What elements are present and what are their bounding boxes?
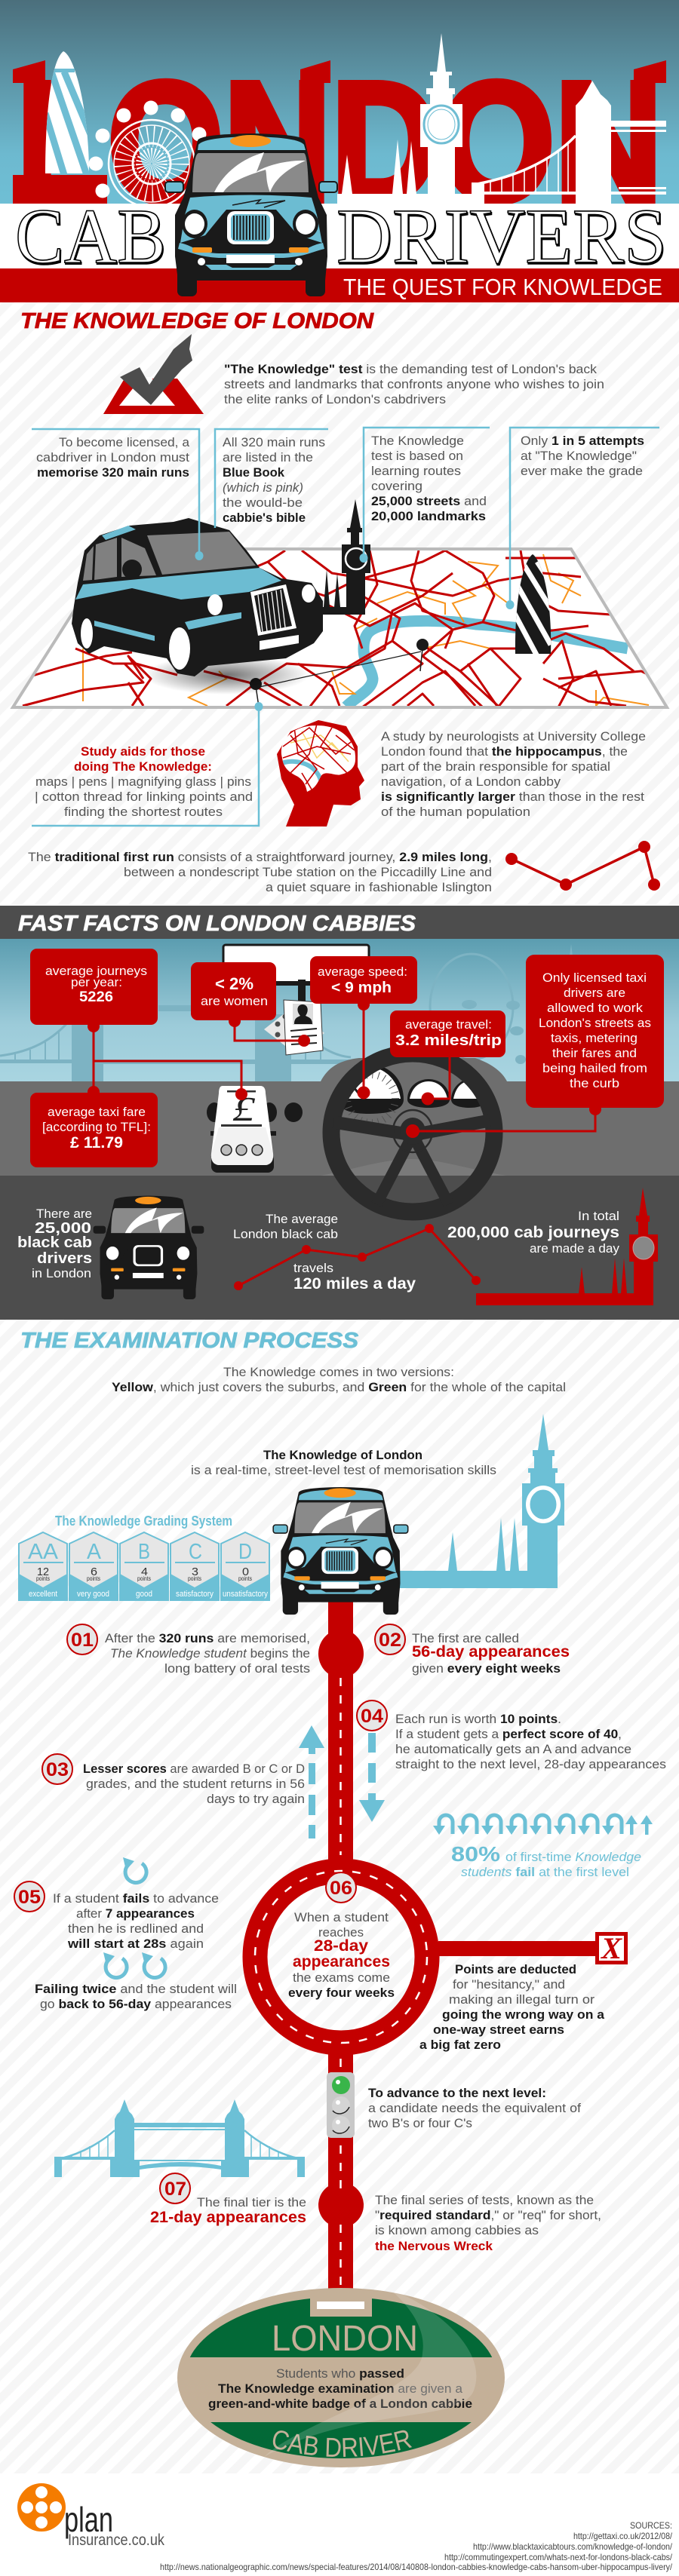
step 04: he automatically gets an A and advance: [395, 1742, 631, 1756]
footer: [0, 2473, 679, 2576]
grade B: 4: [141, 1566, 148, 1578]
badge text: green-and-white badge of a London cabbie: [208, 2397, 472, 2411]
step 07: 07: [164, 2179, 186, 2200]
text: advance to next level: To advance to the next level:: [368, 2086, 546, 2100]
callout: study aids: doing The Knowledge:: [74, 759, 212, 774]
white band: cab drivers: [0, 204, 679, 269]
step 07: The final tier is the: [197, 2195, 306, 2210]
callout: streets and landmarks: 25,000 streets and: [371, 494, 487, 508]
callout: study aids: finding the shortest routes: [64, 805, 223, 819]
callout: licensed taxi drivers: Only licensed taxi: [542, 971, 647, 985]
step 02: 02: [379, 1630, 401, 1651]
callout: memorise 320 main runs: [32, 429, 204, 560]
text: two versions: The Knowledge comes in two versions:: [223, 1365, 454, 1379]
windscreen sky: [0, 939, 679, 1082]
icon: rear view mirror: [223, 945, 369, 986]
icon: big ben black: [321, 499, 370, 615]
text: points deducted: [419, 1962, 605, 2052]
text: nervous wreck: is known among cabbies as: [375, 2223, 539, 2237]
callout: licensed taxi drivers: being hailed from: [542, 1061, 647, 1075]
text: 80 percent fail: students fail at the first level: [461, 1865, 629, 1879]
speed dot: [358, 1086, 370, 1099]
text: points deducted: one-way street earns: [433, 2022, 564, 2037]
grade C: satisfactory: [176, 1590, 214, 1599]
text: total journeys: In total: [578, 1209, 619, 1223]
text: advance to next level: two B's or four C's: [368, 2116, 472, 2130]
text: traditional first run: [28, 850, 492, 894]
panel: examination process: [0, 1320, 679, 2473]
text: 80 percent fail: [451, 1842, 641, 1879]
callout: journeys per year: [30, 949, 158, 1032]
grade D: points: [238, 1575, 252, 1582]
text: nervous wreck: The final series of tests, known as the: [375, 2193, 594, 2207]
callout: study aids: [32, 702, 263, 826]
step 03: grades, and the student returns in 56: [86, 1777, 305, 1791]
callout: journeys per year: average journeys: [45, 964, 147, 978]
callout: average speed: [310, 956, 417, 1010]
text: advance to next level: [368, 2086, 581, 2130]
callout: streets and landmarks: covering: [371, 479, 422, 493]
callout: streets and landmarks: [359, 428, 490, 563]
map with routes: [13, 549, 667, 707]
step 06: [288, 1872, 395, 2000]
icon: taxi meter: [207, 1086, 303, 1173]
callout: average travel: [390, 1010, 505, 1057]
text: two versions: [112, 1365, 566, 1394]
step 02: given every eight weeks: [412, 1661, 561, 1676]
step 06: When a student: [294, 1910, 389, 1924]
badge text: Students who passed: [276, 2366, 404, 2381]
callout: blue book: [215, 429, 328, 528]
icon: london eye: [89, 101, 207, 207]
title: CAB: CAB: [15, 193, 166, 280]
callout: blue book: the would-be: [223, 495, 303, 510]
icon: big ben: [420, 33, 462, 198]
callout: 1 in 5 attempts: at "The Knowledge": [521, 449, 637, 463]
step 06: every four weeks: [288, 1986, 395, 2000]
sky silhouette bridge and eye: [0, 944, 576, 1083]
callout: percent women: < 2%: [215, 974, 253, 993]
callout: blue book: All 320 main runs: [223, 435, 325, 449]
text: traditional first run: a quiet square in fashionable Islington: [266, 880, 492, 894]
text: points deducted: for "hesitancy," and: [453, 1977, 565, 1992]
step 03: [42, 1754, 305, 1806]
icon: fail rate arrows: [433, 1815, 653, 1835]
step 05: after 7 appearances: [76, 1906, 195, 1921]
step 02: The first are called: [412, 1631, 519, 1645]
callout: journeys per year: per year:: [71, 975, 122, 989]
callout: streets and landmarks: test is based on: [371, 449, 463, 463]
step 05: [14, 1881, 219, 1951]
callout: 1 in 5 attempts: [505, 428, 659, 609]
grade C: [171, 1532, 219, 1600]
heading: THE KNOWLEDGE OF LONDON: [20, 309, 374, 333]
sources: SOURCES:: [630, 2520, 672, 2531]
text: failing twice: [35, 1982, 237, 2011]
callout: licensed taxi drivers: the curb: [570, 1076, 619, 1090]
callout: journeys per year: 5226: [79, 989, 113, 1005]
grade AA: 12: [37, 1566, 49, 1578]
grade B: good: [136, 1590, 152, 1599]
grade AA: AA: [28, 1540, 59, 1564]
text: miles a day: 120 miles a day: [293, 1275, 416, 1293]
icon: gherkin black: [515, 554, 551, 654]
travel dot: [421, 1092, 435, 1106]
grade AA: [19, 1532, 67, 1600]
red callout connectors: [94, 1004, 595, 1131]
icon: big ben red: [476, 1188, 658, 1305]
callout: licensed taxi drivers: [526, 955, 664, 1115]
header panel: [0, 0, 679, 302]
callout: blue book: cabbie's bible: [223, 511, 306, 525]
grade A: [69, 1532, 118, 1600]
callout: memorise 320 main runs: To become licensed, a: [59, 435, 190, 449]
title: DRIVERS: DRIVERS: [336, 193, 667, 280]
step 03: Lesser scores are awarded B or C or D: [83, 1762, 305, 1776]
text: total journeys: 200,000 cab journeys: [447, 1224, 619, 1241]
icon: head with map brain: [277, 720, 364, 826]
icon: tower bridge: [472, 81, 666, 205]
arrow: dashed down: [359, 1733, 385, 1822]
icon: steering wheel: [331, 1053, 494, 1212]
icon: traffic light: [327, 2072, 355, 2138]
callout: taxi fare: £ 11.79: [70, 1134, 123, 1152]
badge: [177, 2288, 505, 2467]
badge: CAB DRIVER: [273, 2430, 412, 2457]
step 02: 56-day appearances: [412, 1643, 570, 1661]
logo: plan: [64, 2500, 113, 2539]
text: number of drivers: in London: [32, 1266, 91, 1280]
sources: [160, 2520, 673, 2572]
text: hippocampus study: [381, 729, 646, 819]
hub dot: [406, 1124, 419, 1138]
panel: fast facts: [0, 905, 679, 1320]
callout: taxi fare: [according to TFL]:: [42, 1120, 151, 1134]
text: the knowledge intro: "The Knowledge" test is the demanding test of London's back: [224, 362, 598, 376]
grade D: [221, 1532, 269, 1600]
chart: cab daily route: [234, 1224, 481, 1290]
text: 80 percent fail: 80%: [451, 1842, 500, 1866]
heading: FAST FACTS ON LONDON CABBIES: [18, 912, 416, 936]
grading system: [19, 1513, 269, 1600]
text: number of drivers: There are: [36, 1207, 92, 1221]
step 03: 03: [46, 1759, 69, 1780]
callout: streets and landmarks: learning routes: [371, 464, 461, 478]
text: traditional first run: between a nondescript Tube station on the Piccadilly Line and: [124, 865, 492, 879]
red subtitle band: [0, 268, 679, 302]
text: advance to next level: a candidate needs the equivalent of: [368, 2101, 581, 2115]
text: total journeys: [447, 1209, 619, 1256]
callout: study aids: | cotton thread for linking points and: [35, 790, 253, 804]
step 02: [375, 1624, 570, 1676]
skyline: parliament spires: [337, 140, 473, 204]
id card connector dot: [298, 1035, 310, 1047]
meter connector dot: [235, 1088, 247, 1100]
text: nervous wreck: the Nervous Wreck: [375, 2239, 493, 2253]
callout: licensed taxi drivers: London's streets as: [539, 1016, 651, 1030]
icon: speedometer gauges: [338, 1065, 487, 1123]
grade A: A: [87, 1540, 102, 1564]
text: real-time test: [191, 1448, 496, 1477]
callout: average speed: average speed:: [318, 964, 407, 979]
callout: blue book: Blue Book: [223, 465, 285, 480]
text: failing twice: go back to 56-day appearances: [40, 1997, 232, 2011]
step 01: After the 320 runs are memorised,: [105, 1631, 310, 1645]
callout: study aids: maps | pens | magnifying glass | pins: [35, 774, 251, 789]
text: nervous wreck: [375, 2193, 601, 2253]
logo: [17, 2483, 164, 2549]
callout: percent women: [191, 962, 276, 1027]
text: real-time test: is a real-time, street-level test of memorisation skills: [191, 1463, 496, 1477]
callout: average travel: average travel:: [405, 1017, 492, 1032]
chart: first run route: [505, 841, 660, 891]
text: miles a day: The average: [266, 1212, 338, 1226]
text: nervous wreck: "required standard," or "req" for short,: [375, 2208, 601, 2222]
callout: blue book: (which is pink): [223, 480, 303, 495]
callout: streets and landmarks: The Knowledge: [371, 434, 464, 448]
step 06: the exams come: [293, 1970, 390, 1985]
badge curved text: [268, 2446, 415, 2457]
callout: study aids: Study aids for those: [81, 744, 205, 759]
grade D: unsatisfactory: [223, 1590, 268, 1599]
step 04: [357, 1700, 666, 1771]
callout: 1 in 5 attempts: ever make the grade: [521, 464, 643, 478]
grading title: The Knowledge Grading System: [55, 1513, 232, 1529]
icon: x sign: X: [600, 1931, 622, 1965]
callout: taxi fare: average taxi fare: [48, 1105, 146, 1119]
callout: memorise 320 main runs: cabdriver in London must: [36, 450, 189, 465]
text: points deducted: making an illegal turn or: [449, 1992, 595, 2007]
step 04: If a student gets a perfect score of 40,: [395, 1727, 622, 1741]
badge text: The Knowledge examination are given a: [218, 2381, 463, 2396]
text: number of drivers: black cab: [17, 1234, 92, 1251]
callout: average travel: 3.2 miles/trip: [395, 1032, 502, 1049]
icon: x sign: [595, 1931, 628, 1965]
callout: licensed taxi drivers: their fares and: [552, 1046, 637, 1060]
callout: average speed: < 9 mph: [331, 980, 392, 996]
panel: the knowledge of london: [0, 302, 679, 905]
icon: front of taxi: [165, 133, 337, 296]
text: number of drivers: [17, 1207, 92, 1280]
icon: tower bridge teal: [54, 2099, 305, 2177]
text: the knowledge intro: streets and landmarks that confronts anyone who wishes to join: [224, 377, 604, 391]
grade A: points: [87, 1575, 100, 1582]
text: the knowledge intro: the elite ranks of London's cabdrivers: [224, 392, 446, 406]
grade D: 0: [242, 1566, 249, 1578]
callout: taxi fare: [30, 1086, 158, 1167]
text: points deducted: a big fat zero: [419, 2038, 501, 2052]
grade A: 6: [91, 1566, 97, 1578]
text: hippocampus study: London found that the hippocampus , the: [381, 744, 628, 759]
icon: single retry arrow: [123, 1857, 146, 1883]
icon: double retry arrows: [103, 1952, 165, 1978]
step 07: 21-day appearances: [150, 2209, 306, 2226]
text: hippocampus study: of the human population: [381, 805, 530, 819]
text: two versions: Yellow, which just covers the suburbs, and Green for the whole of the capital: [112, 1380, 566, 1394]
text: hippocampus study: part of the brain responsible for spatial: [381, 759, 610, 774]
step 04: straight to the next level, 28-day appearances: [395, 1757, 666, 1771]
step 06: appearances: [293, 1953, 390, 1970]
grade B: points: [137, 1575, 151, 1582]
grade A: very good: [77, 1590, 109, 1599]
step 01: The Knowledge student begins the: [110, 1646, 310, 1661]
icon: taxi meter: £: [232, 1090, 256, 1128]
icon: id card: [264, 980, 324, 1055]
step 04: 04: [361, 1706, 383, 1727]
grade AA: excellent: [29, 1590, 57, 1599]
logo: Insurance.co.uk: [68, 2532, 164, 2549]
text: traditional first run: The traditional first run consists of a straightforward journey, 2.9 miles long ,: [28, 850, 492, 864]
callout: streets and landmarks: 20,000 landmarks: [371, 509, 486, 523]
dashboard: [0, 1058, 679, 1176]
text: hippocampus study: A study by neurologists at University College: [381, 729, 646, 744]
step 03: days to try again: [207, 1792, 305, 1806]
callout: licensed taxi drivers: drivers are: [564, 986, 625, 1000]
text: the knowledge intro: [224, 362, 604, 406]
badge title: LONDON: [272, 2319, 418, 2359]
callout: 1 in 5 attempts: Only 1 in 5 attempts: [521, 434, 644, 448]
text: points deducted: Points are deducted: [455, 1962, 576, 1976]
icon: check mark on triangle: [103, 334, 204, 414]
text: miles a day: travels: [293, 1261, 333, 1275]
callout: licensed taxi drivers: taxis, metering: [551, 1031, 638, 1045]
text: failing twice: Failing twice and the student will: [35, 1982, 237, 1996]
step 06: 28-day: [314, 1937, 368, 1955]
grade C: points: [188, 1575, 201, 1582]
text: points deducted: going the wrong way on a: [442, 2007, 605, 2022]
text: total journeys: are made a day: [530, 1241, 619, 1256]
step 06: 06: [330, 1878, 352, 1899]
step 04: Each run is worth 10 points.: [395, 1712, 561, 1726]
step 05: then he is redlined and: [68, 1921, 204, 1936]
grade B: [120, 1532, 168, 1600]
step 06: reaches: [318, 1925, 364, 1940]
grade AA: points: [36, 1575, 50, 1582]
text: miles a day: London black cab: [233, 1227, 338, 1241]
callout: percent women: are women: [201, 994, 268, 1008]
grade B: B: [138, 1540, 150, 1564]
step 05: 05: [18, 1887, 41, 1908]
grade C: C: [189, 1540, 202, 1564]
callout: blue book: are listed in the: [223, 450, 313, 465]
text: 80 percent fail: of first-time Knowledge: [505, 1850, 641, 1864]
callout: memorise 320 main runs: memorise 320 main runs: [37, 465, 189, 480]
road with roundabout: [255, 1599, 597, 2292]
step 01: 01: [71, 1630, 94, 1651]
grade D: D: [238, 1540, 252, 1564]
text: hippocampus study: is significantly larger than those in the rest: [381, 790, 644, 804]
step 05: will start at 28s again: [67, 1937, 204, 1951]
text: number of drivers: drivers: [37, 1250, 92, 1267]
arrow: dashed up: [299, 1725, 324, 1838]
text: real-time test: The Knowledge of London: [263, 1448, 422, 1462]
icon: pins and thread: [250, 639, 429, 707]
icon: big ben teal: [400, 1414, 564, 1588]
heading: THE EXAMINATION PROCESS: [20, 1329, 359, 1353]
text: miles a day: [233, 1212, 416, 1293]
step 01: long battery of oral tests: [164, 1661, 310, 1676]
step 01: [67, 1624, 310, 1676]
step 05: If a student fails to advance: [53, 1891, 219, 1906]
badge text: [208, 2366, 472, 2411]
text: number of drivers: 25,000: [35, 1220, 91, 1237]
text: hippocampus study: navigation, of a London cabby: [381, 774, 561, 789]
callout: licensed taxi drivers: allowed to work: [547, 1001, 644, 1015]
icon: top of taxi front on road: [273, 1487, 408, 1615]
icon: gherkin: [45, 51, 89, 173]
step 07: [150, 2173, 306, 2226]
grade C: 3: [192, 1566, 198, 1578]
icon: black cab side view: [72, 518, 323, 695]
icon: black cab front: [94, 1196, 204, 1299]
